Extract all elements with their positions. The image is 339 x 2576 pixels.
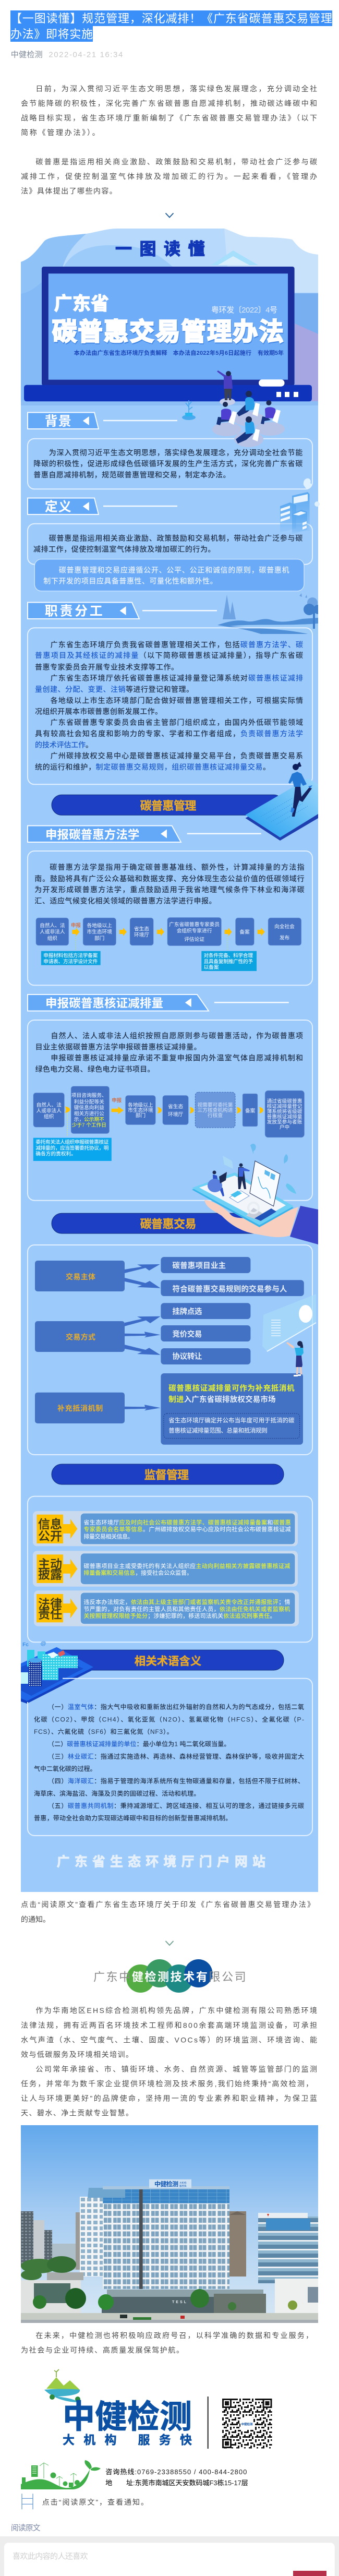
- recommendation heading: 喜欢此内容的人还喜欢: [13, 2552, 88, 2561]
- company paragraph 2: 天、碧水、净土贡献专业智慧。: [21, 2108, 133, 2117]
- company paragraph 2: 公司常年承接省、市、镇街环境、水务、自然资源、城管等监管部门的监测: [35, 2065, 317, 2073]
- closing paragraph: 在未来，中健检测也将积极响应政府号召，以科学准确的数据和专业服务，: [35, 2331, 313, 2340]
- box: 碳普惠项目业主: [161, 1257, 250, 1273]
- card: 背景 text: 降碳的积极性，促进形成绿色低碳循环发展的生产生活方式，深化完善广东省碳: [33, 460, 302, 468]
- box: 交易主体: 交易主体: [66, 1273, 95, 1281]
- flow chart: 核证减排量: 部门: [136, 1112, 146, 1119]
- illustration: isometric city: Fc: [22, 1642, 29, 1648]
- row: 主动披露: [33, 1551, 298, 1587]
- monitor subtext: [74, 349, 284, 356]
- flow chart: 核证减排量: 薄系统将省级碳: [267, 1108, 302, 1115]
- monitor: [24, 267, 312, 401]
- document number: 粤环发〔2022〕4号: [211, 305, 277, 315]
- pill: 碳普惠管理: 碳普惠管理: [140, 799, 196, 812]
- company paragraph 2: 让人与环境更美好”的品牌使命，坚持用一流的专业素养和职业精神，为保卫蓝: [21, 2094, 317, 2102]
- row: 信息公开: 信息: [38, 1517, 62, 1531]
- row: 法律责任: 法律: [38, 1597, 62, 1610]
- card: 背景 text: 为深入贯彻习近平生态文明思想，落实绿色发展理念，充分调动全社会节能: [49, 448, 302, 457]
- company sign on roof: 中健检测: [154, 2180, 178, 2188]
- flow chart: 核证减排量: 普惠核证减排量: [267, 1113, 302, 1120]
- author and date: 2022-04-21 16:34: [49, 50, 123, 59]
- monitor base: [24, 385, 312, 401]
- flow chart: 核证减排量: 市生态环境: [128, 1107, 153, 1113]
- closing paragraph: 为社会与企业可持续、高质量发展保驾护航。: [21, 2346, 184, 2354]
- box: 挂牌点选: 挂牌点选: [172, 1307, 202, 1316]
- monitor title: 碳普惠交易管理办法: 碳普惠交易管理办法: [52, 318, 284, 346]
- flow chart: 方法学: 向全社会: [274, 923, 295, 930]
- photo: company building: TESL: [172, 2301, 188, 2304]
- row: 法律责任: 关按照管理权限给予处分；涉嫌犯罪的，移送司法机关依法追究刑事责任。: [83, 1612, 275, 1619]
- box: 补充抵消说明: 普惠核证减排量范围、总量和抵消规则: [168, 1427, 268, 1434]
- company sign on roof: 服务快: [179, 2184, 187, 2188]
- box: 补充抵消说明: 碳普惠核证减排量可作为补充抵消机: [168, 1384, 295, 1393]
- flow chart: 核证减排量: 利益分配等关: [74, 1098, 104, 1105]
- card: 职责分工 text: 各地级以上市生态环境部门配合做好碳普惠管理相关工作，可根据实际情: [51, 696, 303, 704]
- flow chart: 核证减排量: 项目咨询服务、: [71, 1092, 107, 1099]
- title: 办法》即将实施: [10, 28, 93, 41]
- illustration: woman and data panel: [262, 1294, 316, 1376]
- flow chart: 方法学: 自然人、法: [40, 922, 65, 929]
- box: 补充抵消说明: 省生态环境厅确定并公布当年度可用于抵消的碳: [168, 1417, 295, 1424]
- row: 法律责任: 节严重的，对负有责任的主管人员和其他责任人员，依法由任免机关或者监察机: [83, 1605, 290, 1612]
- flow chart: 方法学: 人或非法人: [40, 928, 65, 935]
- card: 申报碳普惠方法学: 为开发形成碳普惠方法学，重点鼓励适用于我省地理气候条件下林业和海洋碳: [34, 885, 305, 894]
- company banner: [93, 1959, 246, 1993]
- flow chart: 核证减排量: 键信息向利益: [74, 1104, 104, 1111]
- title: 【一图读懂】规范管理，深化减排！《广东省碳普惠交易管理: [10, 12, 332, 25]
- box: 交易方式: 交易方式: [66, 1333, 95, 1341]
- text: read original note: 点击“阅读原文”查看广东省生态环境厅关于印发《广东省碳普惠交易管理办法》: [21, 1900, 314, 1909]
- row: 法律责任: 责任: [38, 1607, 62, 1621]
- flow chart: 方法学: 申报材料包括方法学备案: [43, 952, 98, 959]
- author and date: 中健检测: [11, 50, 43, 59]
- tag: 职责分工: 职责分工: [45, 604, 103, 619]
- flow chart: 核证减排量: 备案: [245, 1107, 256, 1114]
- box: 竞价交易: 竞价交易: [172, 1329, 202, 1339]
- flow chart: 核证减排量: 委托有关法人组织申报碳普惠核证: [35, 1139, 109, 1145]
- row: 信息公开: [33, 1511, 298, 1546]
- card: 背景 text: [28, 439, 312, 489]
- card: 申报碳普惠方法学: [28, 851, 312, 985]
- flow chart: 核证减排量: 自然人、法: [36, 1101, 62, 1108]
- flow chart: 方法学: 对条件完备、科学合理: [203, 952, 253, 959]
- company paragraph 1: 法律法规，拥有近两百名环境技术工程师和800余套高端环境监测设备，可承担: [21, 2021, 317, 2029]
- card: 申报碳普惠核证减排量: 绿色电力交易、绿色电力证书项目。: [35, 1065, 154, 1073]
- footer heading: 广东省生态环境厅门户网站: 广东省生态环境厅门户网站: [57, 1854, 265, 1869]
- flow chart: 方法学: 省生态: [134, 926, 149, 932]
- intro paragraph 1: [21, 85, 317, 137]
- box: 竞价交易: [161, 1325, 250, 1341]
- intro paragraph 1: 简称《管理办法》）。: [21, 128, 100, 137]
- flow chart: 核证减排量: 发放至参与者账: [267, 1119, 302, 1125]
- illustration: isometric city: @: [41, 1640, 46, 1647]
- callout: principles: 碳普惠管理和交易应遵循公开、公平、公正和诚信的原则，碳普惠机: [59, 566, 289, 574]
- box: 协议转让: 协议转让: [172, 1352, 202, 1361]
- card: 职责分工 text: [28, 628, 312, 784]
- flow chart: 方法学: 且具备复制推广性的予: [203, 958, 253, 965]
- flow chart: 核证减排量: 相关方进行公: [74, 1110, 104, 1117]
- pill: 碳普惠交易: 碳普惠交易: [140, 1218, 196, 1231]
- card: 申报碳普惠核证减排量: [28, 1020, 312, 1201]
- monitor subtext: 本办法自2022年5月6日起施行: [173, 349, 251, 356]
- callout: principles: [34, 559, 304, 591]
- company sign on roof: 大机构: [179, 2181, 187, 2185]
- flow chart: 方法学: 会组织专家进行: [177, 927, 212, 934]
- flow chart: 方法学: 以备案: [203, 964, 219, 971]
- card: 定义 text: [28, 524, 312, 565]
- intro paragraph 1: 战略目标实现，省生态环境厅重新编制了《广东省碳普惠交易管理办法》（以下: [21, 114, 317, 122]
- card: 职责分工 text: 统的运行和维护，制定碳普惠交易规则，组织碳普惠核证减排量交易。: [35, 763, 270, 771]
- card: 职责分工 text: 广东省生态环境厅负责我省碳普惠管理相关工作，包括碳普惠方法学、碳: [51, 641, 303, 649]
- row: 信息公开: 专家委员会名单等信息。广州碳排放权交易中心应及时向社会公布碳普惠核证减: [83, 1526, 291, 1533]
- tag: 定义: [28, 498, 177, 514]
- company banner: 广东中健检测技术有限公司: [93, 1970, 246, 1984]
- flow chart: 核证减排量: 环境厅: [168, 1111, 184, 1118]
- card: 相关术语含义: （三）林业碳汇：指通过实施造林、再造林、森林经营管理、森林保护等，吸收并固定大: [48, 1752, 304, 1760]
- box: 挂牌点选: [161, 1303, 250, 1319]
- box: 交易方式: [35, 1321, 125, 1352]
- intro paragraph 2: 法》具体提出了哪些内容。: [21, 187, 117, 195]
- card: 相关术语含义: 化碳（CO2）、甲烷（CH4）、氧化亚氮（N2O）、氢氟碳化物（HFCS）、全氟化碳（P-: [34, 1715, 304, 1723]
- box: 交易参与人: [161, 1280, 304, 1296]
- card: 定义 text: 减排工作，促使控制温室气体排放及增加碳汇的行为。: [33, 545, 215, 554]
- pill: 相关术语含义: 相关术语含义: [135, 1655, 201, 1668]
- card: 申报碳普惠核证减排量: 申报碳普惠核证减排量应承诺不重复申报国内外温室气体自愿减排机制和: [51, 1054, 303, 1062]
- flow chart: 方法学: 市生态环境: [87, 928, 112, 935]
- logo mountain emblem: [44, 2369, 80, 2402]
- card: 相关术语含义: 气中二氧化碳的过程。: [34, 1765, 96, 1772]
- infographic background: [21, 229, 318, 1892]
- link: 阅读原文: 阅读原文: [11, 2523, 41, 2533]
- box: 补充抵消机制: 补充抵消机制: [57, 1404, 103, 1412]
- closing paragraph: [21, 2331, 313, 2354]
- flow chart: 核证减排量: 视需要可委托第: [198, 1101, 233, 1108]
- card: 相关术语含义: 海草床、滨海盐沼、海藻及贝类的固碳过程、活动和机理。: [34, 1789, 200, 1797]
- tag: 背景: [28, 412, 177, 429]
- callout: principles: 制下开发的项目应具备普惠性、可量化性和额外性。: [43, 577, 217, 585]
- monitor buttons: [276, 392, 298, 397]
- flow chart: 核证减排量: 行核查: [208, 1112, 223, 1119]
- flow chart: 核证减排量: [33, 1086, 305, 1161]
- flow chart: 方法学: 备案: [239, 929, 250, 935]
- monitor pill: [259, 379, 285, 387]
- flow chart: 方法学: 部门: [94, 935, 104, 941]
- tag: 申报碳普惠方法学: [28, 825, 261, 842]
- pill: 相关术语含义: [52, 1650, 284, 1670]
- recommendation thumbnail: [293, 2571, 326, 2576]
- tag: 申报碳普惠核证减排量: [28, 995, 289, 1011]
- flow chart: 方法学: 环境厅: [134, 931, 149, 938]
- row: 信息公开: 排量交易相关信息。: [83, 1532, 134, 1540]
- pill: 碳普惠交易: [52, 1213, 284, 1233]
- illustration: hand holding phone with analysts: [192, 1144, 318, 1244]
- logo: 中健检测: [44, 2369, 208, 2449]
- box: 补充抵消机制: [35, 1393, 125, 1423]
- card: 监督管理: [28, 1496, 312, 1642]
- row: 主动披露: 排量备案和交易信息，接受社会公众监督。: [83, 1569, 192, 1576]
- box: 补充抵消说明: 制进入广东省碳排放权交易市场: [168, 1395, 275, 1404]
- box: 补充抵消说明: [161, 1373, 303, 1445]
- text: read original note: [21, 1900, 314, 1923]
- monitor subtext: 有效期5年: [258, 349, 284, 356]
- row: 法律责任: 违反本办法规定，依法由其上级主管部门或者监察机关责令改正并通报批评；情: [83, 1598, 290, 1605]
- flow chart: 核证减排量: 示，公示期不: [74, 1117, 104, 1123]
- row: 主动披露: 主动: [38, 1557, 62, 1571]
- flow chart: 核证减排量: 确各方的责权利。: [35, 1150, 76, 1157]
- flow chart: 方法学: [36, 917, 301, 971]
- intro paragraph 1: 会节能降碳的积极性，深化完善广东省碳普惠自愿减排机制，推动碳达峰碳中和: [21, 99, 317, 107]
- company paragraph 1: 水气声渣（水、空气废气、土壤、固废、VOCs等）的环境监测、环境咨询、能: [21, 2035, 317, 2044]
- illustration: presenter and seated audience: [212, 370, 285, 447]
- card: 申报碳普惠方法学: 碳普惠方法学是指用于确定碳普惠基准线、额外性，计算减排量的方法指: [50, 863, 305, 871]
- illustration: buildings: [280, 478, 320, 534]
- illustration: green city: [21, 2460, 101, 2489]
- company paragraph 2: [21, 2065, 317, 2117]
- contact details: [105, 2468, 248, 2487]
- row: 主动披露: 碳普惠项目业主或受委托的有关法人组织应主动向利益相关方披露碳普惠核证减: [83, 1562, 290, 1569]
- intro paragraph 2: 减排工作，促使控制温室气体排放及增加碳汇的行为。一起来看看，《管理办: [21, 172, 317, 181]
- flow chart: 方法学: 组织: [47, 935, 57, 941]
- QR code: [222, 2399, 272, 2448]
- card: 相关术语含义: [28, 1679, 312, 1836]
- flow chart: 核证减排量: 户中: [280, 1124, 289, 1130]
- title: [10, 10, 332, 42]
- flow chart: 方法学: 申请表、方法学设计文件: [43, 958, 98, 965]
- flow chart: 核证减排量: 各地级以上: [128, 1101, 153, 1108]
- tag: 职责分工: [28, 602, 217, 619]
- company paragraph 1: 效与低碳服务及环境相关培训。: [21, 2050, 133, 2058]
- tag: 定义: 定义: [45, 500, 71, 514]
- monitor title: 广东省: 广东省: [54, 294, 109, 314]
- icon: ladder: [22, 2494, 33, 2509]
- card: 申报碳普惠方法学: 汇、适应气候变化相关领域的碳普惠方法学进行申报。: [34, 896, 216, 905]
- card: 申报碳普惠核证减排量: 自然人、法人或非法人组织按照自愿原则参与碳普惠活动，作为碳普惠项: [51, 1032, 303, 1040]
- card: 职责分工 text: 况组织开展本市碳普惠创新发展工作。: [35, 707, 162, 715]
- flow chart: 方法学: 申报: [71, 922, 81, 929]
- pill: 监督管理: [52, 1464, 284, 1484]
- flow chart: 核证减排量: 减排量的，应当签署委托协议，明: [35, 1145, 109, 1151]
- text: click read original: 点击“阅读原文”，查看通知。: [42, 2498, 148, 2506]
- company paragraph 2: 任务，并常年为数千家企业提供环境检测及技术服务,我们始终秉持“高效检测，: [21, 2079, 313, 2088]
- box: 协议转让: [161, 1348, 250, 1364]
- logo: 中健检测: 中健检测: [63, 2399, 192, 2435]
- logo: 中健检测: 大机构 服务快: [63, 2433, 192, 2447]
- contact details: 址:东莞市南城区天安数码城F3栋15-17层: [126, 2479, 248, 2487]
- tag: 申报碳普惠核证减排量: 申报碳普惠核证减排量: [45, 997, 163, 1010]
- card: 相关术语含义: （五）碳普惠共同机制：秉持减源增汇、跨区域连接、相互认可的理念，通过链接多元碳: [48, 1802, 304, 1810]
- contact details: 咨询热线:0769-23388550 / 400-844-2800: [105, 2468, 247, 2476]
- contact details: 地: [105, 2479, 112, 2487]
- text: read original note: 的通知。: [21, 1915, 50, 1923]
- tag: 背景: 背景: [45, 414, 71, 429]
- row: 信息公开: 公开: [38, 1529, 62, 1543]
- illustration: trees and hills: [217, 593, 318, 634]
- row: 信息公开: 省生态环境厅应及时向社会公布碳普惠方法学、碳普惠核证减排量备案和碳普惠: [83, 1518, 291, 1526]
- card: 相关术语含义: FCS）、六氟化硫（SF6）和三氟化氮（NF3）。: [34, 1728, 173, 1735]
- flow chart: 方法学: 广东省碳普惠专家委员: [169, 921, 220, 928]
- flow chart: 核证减排量: 申报: [112, 1097, 122, 1104]
- footer gray band: [0, 2536, 339, 2576]
- flow chart: 核证减排量: 省生态: [168, 1103, 184, 1110]
- box: 碳普惠项目业主: 碳普惠项目业主: [172, 1261, 226, 1270]
- card: 相关术语含义: （二）碳普惠核证减排量的单位：最小单位为1 吨二氧化碳当量。: [48, 1740, 230, 1748]
- illustration: runner on phone: [245, 762, 318, 841]
- card: 职责分工 text: 普惠专家委员会开展专业技术支撑等工作。: [35, 663, 178, 671]
- flow chart: 方法学: 发布: [280, 934, 289, 941]
- card: 定义 text: 碳普惠是指运用相关商业激励、政策鼓励和交易机制，带动社会广泛参与碳: [49, 534, 302, 543]
- card: 相关术语含义: （四）海洋碳汇：指易于管理的海洋系统所有生物碳通量和存量，包括但不限于红树林、: [48, 1777, 304, 1785]
- card: 背景 text: 普惠自愿减排机制，规范碳普惠管理和交易，制定本办法。: [33, 471, 231, 479]
- company paragraph 1: [21, 2006, 317, 2058]
- QR code: 中健检测: [241, 2422, 253, 2426]
- card: 职责分工 text: 广东省碳普惠专家委员会由省主管部门组织成立，由国内外低碳节能领域: [51, 718, 303, 727]
- card: 职责分工 text: 普惠项目及其经核证的减排量（以下简称碳普惠核证减排量），指导广东省碳: [35, 651, 303, 660]
- card: 相关术语含义: 普惠，带动全社会助力实现碳达峰碳中和目标的创新型普惠减排机制。: [34, 1814, 232, 1822]
- flow chart: 核证减排量: 少于7 个工作日: [72, 1122, 106, 1128]
- card: 职责分工 text: 广东省生态环境厅依托省碳普惠核证减排量登记薄系统对碳普惠核证减排: [51, 674, 303, 682]
- company sign on roof: [149, 2179, 191, 2188]
- intro paragraph 2: [21, 158, 317, 195]
- pill: 监督管理: 监督管理: [144, 1469, 189, 1482]
- pill: 碳普惠管理: [52, 795, 284, 815]
- heading: 一图读懂: 一图读懂: [115, 239, 204, 258]
- icon: chevron down: [166, 213, 173, 217]
- card: 申报碳普惠方法学: 南。鼓励将具有广泛公众基础和数据支撑、充分体现生态公益价值的低碳领域行: [34, 874, 305, 883]
- intro paragraph 1: 日前，为深入贯彻习近平生态文明思想，落实绿色发展理念，充分调动全社: [35, 85, 317, 93]
- monitor subtext: 本办法由广东省生态环境厅负责解释: [74, 349, 167, 356]
- card: 职责分工 text: 量创建、分配、变更、注销等进行登记和管理。: [35, 685, 193, 693]
- card: 职责分工 text: 广州碳排放权交易中心是碳普惠核证减排量交易平台，负责碳普惠交易系: [51, 752, 303, 760]
- card: 相关术语含义: （一）温室气体：指大气中吸收和重新放出红外辐射的自然和人为的气态成分，包括二氧: [48, 1703, 304, 1711]
- flow chart: 核证减排量: 三方核查机构进: [198, 1107, 233, 1113]
- flow chart: 方法学: 评估论证: [184, 936, 204, 942]
- photo: company building: [21, 2125, 318, 2323]
- row: 主动披露: 披露: [38, 1567, 62, 1581]
- flow chart: 方法学: 各地级以上: [87, 922, 112, 929]
- author and date: [11, 50, 123, 59]
- company paragraph 1: 作为华南地区EHS综合检测机构领先品牌，广东中健检测有限公司熟悉环境: [35, 2006, 317, 2015]
- flow chart: 核证减排量: 组织: [44, 1113, 54, 1120]
- flow chart: 核证减排量: 通过省级碳普惠: [267, 1098, 302, 1104]
- box: 交易参与人: 符合碳普惠交易规则的交易参与人: [172, 1284, 287, 1293]
- arrows: [125, 1264, 161, 1410]
- row: 法律责任: [34, 1590, 299, 1626]
- tag: 申报碳普惠方法学: 申报碳普惠方法学: [45, 828, 139, 841]
- illustration: isometric city: [21, 1640, 93, 1704]
- flow chart: 核证减排量: 核证减排量登记: [267, 1103, 302, 1109]
- card: 申报碳普惠核证减排量: 目业主依据碳普惠方法学申报碳普惠核证减排量。: [35, 1043, 201, 1051]
- icon: chevron down green: [166, 1941, 173, 1945]
- flow chart: 核证减排量: 人或非法人: [36, 1107, 62, 1114]
- box: 交易主体: [35, 1261, 125, 1291]
- intro paragraph 2: 碳普惠是指运用相关商业激励、政策鼓励和交易机制，带动社会广泛参与碳: [35, 158, 317, 166]
- card: 职责分工 text: 的技术评估工作。: [35, 740, 93, 749]
- icon: plant: [182, 400, 196, 420]
- card: 职责分工 text: 具有较高社会知名度和影响力的专家、学者和工作者组成，负责碳普惠方法学: [35, 729, 303, 738]
- card: 碳普惠交易: [28, 1245, 312, 1455]
